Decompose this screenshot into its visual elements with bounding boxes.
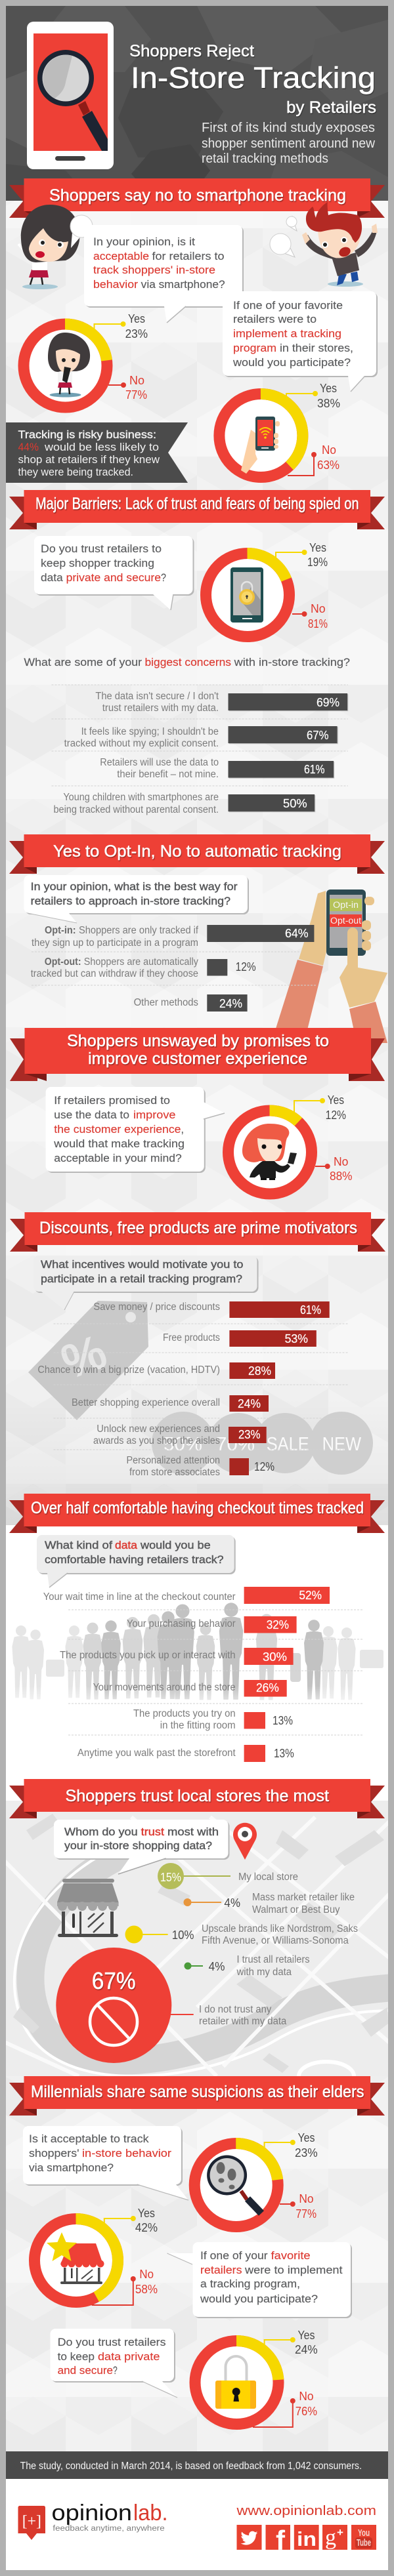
icon: padlock: [215, 2356, 256, 2409]
question bubble: acceptable: behavior: [93, 278, 138, 291]
source note bar: The study, conducted in March 2014, is based on feedback from 1,042 consumers.: [20, 2461, 362, 2472]
donut chart: trust 19 / 81: [206, 554, 289, 636]
labels: no 77 percent: [280, 2192, 317, 2220]
heading ribbon: unswayed: improve customer experience: [88, 1050, 307, 1068]
bar: personalized attention 12 percent: 12%: [254, 1460, 274, 1473]
labels: yes 24 percent: [265, 2329, 318, 2356]
panel: millennials: [9, 2076, 385, 2427]
labels: no 76 percent: 76%: [296, 2405, 317, 2418]
bar: purchasing behavior 32 percent: Your purchasing behavior: [127, 1618, 236, 1629]
question bubble: acceptable: via smartphone?: [141, 278, 225, 291]
question bubble: improve experience: the customer experience: [54, 1123, 181, 1135]
question bubble: improve experience: use the data to: [54, 1109, 129, 1121]
data point: upscale brands 10 percent: [125, 1923, 358, 1946]
question bubble: trust retailers: private and secure: [66, 571, 161, 584]
question bubble: favorite retailers participate: would you participate?: [200, 2293, 318, 2305]
question bubble: acceptable to track: [23, 2126, 188, 2200]
bar: retailers benefit 61 percent: [100, 757, 334, 780]
background: hexagon light panel: [6, 201, 388, 1526]
heading ribbon: unswayed: Shoppers unswayed by promises to: [67, 1032, 329, 1050]
icon: favorite store with star: [47, 2232, 104, 2284]
bar: young children 50 percent: 50%: [283, 797, 307, 810]
question bubble: favorite retailers: would you participate?: [232, 356, 351, 369]
data point: my local store 15 percent: 15%: [160, 1871, 181, 1884]
background: white checkout panel: [6, 1525, 388, 1807]
bar: unlock experiences 23 percent: Unlock new experiences and: [97, 1423, 220, 1435]
icon: hand holding phone with wifi: [241, 417, 280, 474]
question bubble: incentives: participate in a retail tracking program?: [41, 1273, 242, 1285]
labels: no 63 percent: No: [322, 443, 336, 457]
labels: no 58 percent: No: [139, 2268, 154, 2281]
donut chart: acceptable 23 / 77: [24, 324, 107, 407]
question bubble: acceptable: In your opinion, is it: [93, 235, 195, 248]
question bubble: acceptable: track shoppers' in-store: [93, 264, 215, 276]
question bubble: acceptable: acceptable: [93, 250, 149, 262]
bar: opt-in 64 percent: Opt-in:: [45, 925, 76, 936]
panel: incentives: [10, 1212, 385, 1478]
question: biggest concerns: with in-store tracking?: [234, 656, 350, 668]
labels: yes 23 percent: [95, 312, 148, 340]
bar: personalized attention 12 percent: Personalized attention: [126, 1455, 220, 1466]
icon: storefront: [57, 1879, 119, 1937]
labels: no 88 percent: [315, 1155, 352, 1183]
data point: mass market 4 percent: [184, 1892, 355, 1915]
labels: no 76 percent: No: [299, 2390, 314, 2403]
data point: no retailers 67 percent: I do not trust any: [199, 2004, 272, 2015]
question bubble: acceptable to track: in-store behavior: [82, 2147, 171, 2159]
icon: twitter: [236, 2525, 261, 2550]
data point: no retailers 67 percent: [56, 1948, 287, 2063]
labels: no 81 percent: No: [311, 602, 326, 615]
illustration: discount price tag: %: [55, 1324, 114, 1389]
icon: google plus: +: [337, 2526, 343, 2539]
labels: no 88 percent: 88%: [330, 1170, 352, 1183]
logo: opinionlab: feedback anytime, anywhere: [53, 2525, 165, 2533]
bar: free products 53 percent: [163, 1330, 317, 1347]
icon: phone with padlock: [230, 567, 263, 623]
labels: yes 24 percent: 24%: [295, 2343, 318, 2356]
background: hexagon lower panel: [6, 2076, 388, 2451]
callout: tracking is risky business: they were being tracked.: [18, 466, 133, 478]
illustration: discount price tag: [28, 1301, 148, 1420]
character: angry man: [302, 202, 378, 287]
question bubble: acceptable: [84, 225, 244, 323]
labels: no 77 percent: No: [299, 2192, 314, 2205]
question bubble: trust retailers: ?: [161, 571, 166, 584]
data point: mass market 4 percent: Walmart or Best Buy: [252, 1904, 340, 1915]
question: biggest concerns: biggest concerns: [144, 656, 231, 668]
heading ribbon: checkout: [9, 1494, 385, 1533]
labels: yes 38 percent: 38%: [317, 397, 340, 410]
data point: my local store 15 percent: [158, 1863, 298, 1889]
heading ribbon: smartphone tracking: Shoppers say no to smartphone tracking: [49, 186, 346, 205]
bar: data not secure 69 percent: trust retailers with my data.: [102, 703, 219, 714]
question bubble: acceptable to track: Is it acceptable to track: [29, 2133, 149, 2145]
bar chart: incentives: [37, 1301, 330, 1478]
callout: tracking is risky business: 44%: [18, 441, 39, 453]
donut chart: millennials acceptable 23 / 77: [194, 2144, 278, 2226]
heading ribbon: millennials: Millennials share same suspicions as their elders: [31, 2083, 364, 2101]
panel: local stores: [9, 1779, 385, 2063]
bar: fitting room 13 percent: in the fitting room: [160, 1720, 236, 1731]
panel: header: [27, 22, 376, 169]
question bubble: favorite retailers participate: favorite: [271, 2249, 311, 2262]
question bubble: whom do you trust: [54, 1820, 230, 1874]
heading ribbon: major barriers: [9, 490, 385, 529]
bar: unlock experiences 23 percent: awards as you shop the aisles: [93, 1435, 220, 1446]
data point: all retailers 4 percent: [184, 1954, 310, 1978]
callout: tracking is risky business: shop at retailers if they knew: [18, 453, 160, 466]
question bubble: favorite retailers participate: were to implement: [244, 2264, 343, 2276]
question bubble: what data: would you be: [140, 1539, 211, 1551]
bar: opt-out 12 percent: Opt-out:: [45, 956, 81, 968]
labels: no 81 percent: 81%: [308, 617, 328, 630]
question bubble: favorite retailers participate: retailers: [200, 2264, 242, 2276]
labels: yes 19 percent: Yes: [309, 541, 326, 554]
logo: opinionlab: opinion: [51, 2501, 132, 2525]
icon: man speech bubbles: [270, 216, 297, 257]
logo: opinionlab: [18, 2501, 168, 2540]
heading ribbon: discounts: Discounts, free products are prime motivators: [39, 1219, 357, 1237]
labels: yes 12 percent: Yes: [328, 1094, 344, 1107]
bar: better experience 24 percent: Better shopping experience overall: [72, 1397, 220, 1408]
labels: yes 42 percent: [104, 2207, 158, 2234]
footer white panel: [6, 2479, 388, 2570]
data point: upscale brands 10 percent: 10%: [172, 1929, 194, 1942]
bar: fitting room 13 percent: [133, 1708, 293, 1731]
illustration: hands holding phone with opt-in and opt-out: [271, 889, 387, 1043]
bar: feels like spying 67 percent: 67%: [307, 729, 328, 742]
bar: storefront 13 percent: 13%: [274, 1747, 294, 1760]
bar: opt-out 12 percent: 12%: [236, 960, 256, 973]
background: shopper silhouettes: [6, 1603, 388, 1715]
bar: wait time 52 percent: Your wait time in line at the checkout counter: [43, 1591, 236, 1603]
icon: facebook: [265, 2525, 290, 2556]
bar: retailers benefit 61 percent: 61%: [304, 763, 324, 776]
question bubble: improve experience: [46, 1087, 225, 1173]
bar: feels like spying 67 percent: [64, 726, 337, 749]
labels: no 77 percent: [108, 374, 147, 401]
icon: google plus: g: [325, 2525, 336, 2550]
icon: youtube: Tube: [357, 2537, 371, 2548]
bar: personalized attention 12 percent: [126, 1455, 274, 1478]
website url: www.opinionlab.com: [236, 2504, 376, 2518]
bar: products picked up 30 percent: 30%: [263, 1650, 287, 1664]
icon: linkedin: [294, 2525, 319, 2550]
question bubble: acceptable to track: shoppers': [29, 2147, 79, 2159]
question bubble: favorite retailers: [223, 291, 378, 392]
footer: [18, 2501, 376, 2556]
bar: movements 26 percent: 26%: [256, 1681, 279, 1694]
bar: free products 53 percent: Free products: [163, 1332, 220, 1343]
subtitle: shopper sentiment around new: [202, 136, 376, 151]
source note bar: [6, 2451, 388, 2479]
data point: upscale brands 10 percent: Upscale brands like Nordstrom, Saks: [202, 1923, 358, 1934]
bar: young children 50 percent: [54, 792, 315, 815]
bar: storefront 13 percent: [77, 1745, 294, 1762]
question bubble: what data: What kind of: [45, 1539, 112, 1551]
question bubble: keep data private: and secure: [58, 2364, 113, 2377]
panel: opt-in: [9, 834, 387, 1043]
title: by Retailers: [286, 98, 376, 117]
illustration: sale stickers: 50%: [164, 1434, 202, 1455]
heading ribbon: trust local stores: [9, 1779, 385, 1818]
background: header dark panel: [6, 6, 388, 201]
illustration: sale stickers: 70%: [216, 1434, 255, 1455]
subtitle: retail tracking methods: [202, 152, 328, 166]
bar: opt-in 64 percent: they sign up to participate in a program: [32, 937, 198, 949]
bar: opt-in 64 percent: 64%: [285, 927, 309, 940]
heading ribbon: millennials: [9, 2076, 385, 2116]
title: In-Store Tracking: [131, 61, 376, 94]
heading ribbon: discounts: [10, 1212, 385, 1252]
donut chart: millennials trust 24 / 76: [195, 2341, 278, 2424]
labels: yes 38 percent: [286, 382, 340, 410]
bar: movements 26 percent: Your movements around the store: [93, 1682, 236, 1693]
question bubble: keep data private: [50, 2329, 177, 2398]
labels: yes 23 percent: Yes: [128, 312, 145, 325]
bar: other methods 24 percent: 24%: [219, 997, 242, 1010]
bar: better experience 24 percent: [72, 1395, 269, 1412]
data point: all retailers 4 percent: 4%: [209, 1960, 225, 1973]
question bubble: best way: retailers to approach in-store tracking?: [31, 895, 230, 907]
question bubble: acceptable to track: via smartphone?: [29, 2161, 114, 2174]
heading ribbon: opt-in: Yes to Opt-In, No to automatic tracking: [53, 842, 341, 861]
question bubble: keep data private: to keep: [58, 2350, 95, 2363]
question bubble: what data: comfortable having retailers track?: [45, 1553, 224, 1566]
bar: storefront 13 percent: Anytime you walk past the storefront: [77, 1748, 236, 1759]
data point: upscale brands 10 percent: Fifth Avenue, or Williams-Sonoma: [202, 1935, 349, 1946]
labels: yes 23 percent: Yes: [298, 2131, 315, 2144]
question bubble: incentives: [33, 1256, 259, 1310]
data point: mass market 4 percent: 4%: [224, 1896, 240, 1910]
labels: no 77 percent: No: [129, 374, 144, 387]
bar: fitting room 13 percent: The products you try on: [133, 1708, 236, 1719]
bar: other methods 24 percent: Other methods: [134, 997, 198, 1008]
bar: fitting room 13 percent: 13%: [273, 1714, 293, 1727]
icon: woman speech bubble: [70, 215, 93, 248]
bar: opt-in 64 percent: [32, 925, 314, 949]
labels: yes 12 percent: 12%: [326, 1109, 346, 1122]
illustration: sale stickers: SALE: [267, 1434, 309, 1455]
question bubble: improve experience: would that make tracking: [53, 1137, 185, 1150]
bar: personalized attention 12 percent: from store associates: [129, 1467, 220, 1478]
background: street map: [0, 1801, 394, 2091]
question bubble: keep data private: data private: [98, 2350, 160, 2363]
background: darker band behind discounts: [6, 1397, 388, 1526]
callout: tracking is risky business: would be less likely to: [44, 441, 159, 453]
labels: yes 23 percent: 23%: [125, 327, 148, 340]
icon: facebook: f: [276, 2525, 286, 2556]
labels: yes 19 percent: [276, 541, 328, 569]
question bubble: trust retailers: keep shopper tracking: [41, 557, 154, 569]
labels: yes 12 percent: [294, 1094, 346, 1122]
bar: young children 50 percent: being tracked without parental consent.: [54, 804, 219, 815]
title: [129, 42, 376, 117]
bar: save money 61 percent: [93, 1301, 330, 1318]
bar chart: biggest concerns: [54, 691, 347, 815]
question bubble: favorite retailers: implement a tracking: [233, 327, 341, 340]
bar: better experience 24 percent: 24%: [238, 1397, 261, 1410]
labels: no 77 percent: 77%: [125, 388, 147, 401]
question bubble: whom do you trust: trust: [141, 1826, 164, 1838]
callout: tracking is risky business: [6, 422, 188, 483]
icon: google plus: [322, 2525, 347, 2550]
character: surprised woman: [18, 205, 80, 289]
question bubble: improve experience: ,: [181, 1123, 184, 1135]
question bubble: favorite retailers: retailers were to: [233, 313, 317, 325]
character: red-haired woman with phone: [242, 1124, 297, 1180]
illustration: sale stickers: [152, 1412, 373, 1475]
title: Shoppers Reject: [129, 42, 254, 60]
bar: opt-out 12 percent: tracked but can withdraw if they choose: [31, 968, 198, 979]
icon: location pin: [233, 1823, 257, 1860]
question bubble: what data: data: [115, 1539, 138, 1551]
panel: shoppers say no: [6, 178, 385, 483]
data point: no retailers 67 percent: retailer with my data: [199, 2016, 287, 2027]
question bubble: favorite retailers: in their stores,: [280, 342, 353, 354]
icon: youtube: [351, 2525, 376, 2550]
callout: tracking is risky business: Tracking is risky business:: [18, 428, 156, 441]
bar: products picked up 30 percent: [60, 1648, 294, 1665]
bar: retailers benefit 61 percent: their benefit – not mine.: [117, 769, 219, 780]
icon: magnifier with footprints: [207, 2156, 261, 2213]
labels: no 63 percent: [288, 443, 339, 476]
bar: data not secure 69 percent: 69%: [317, 696, 339, 709]
bar: save money 61 percent: 61%: [300, 1303, 321, 1317]
logo: opinionlab: lab.: [133, 2501, 168, 2525]
character: woman with phone: [48, 333, 90, 398]
bar: big prize 28 percent: Chance to win a big prize (vacation, HDTV): [37, 1364, 220, 1376]
labels: yes 24 percent: Yes: [298, 2329, 315, 2342]
icon: smartphone with magnifier: [27, 22, 114, 169]
question bubble: favorite retailers: If one of your favorite: [233, 299, 343, 312]
question bubble: improve experience: improve: [133, 1109, 176, 1121]
question bubble: acceptable: for retailers to: [152, 250, 225, 262]
data point: all retailers 4 percent: I trust all retailers: [236, 1954, 310, 1965]
labels: no 81 percent: [292, 602, 328, 630]
question bubble: trust retailers: data: [41, 571, 63, 584]
question bubble: trust retailers: [34, 536, 194, 610]
bar: purchasing behavior 32 percent: 32%: [267, 1618, 289, 1631]
bar: other methods 24 percent: [134, 994, 248, 1012]
labels: no 77 percent: 77%: [296, 2207, 317, 2220]
question bubble: best way: In your opinion, what is the best way for: [31, 880, 238, 893]
heading ribbon: trust local stores: Shoppers trust local stores the most: [66, 1787, 329, 1805]
bar chart: data tracking comfort: [43, 1587, 330, 1762]
labels: yes 42 percent: Yes: [138, 2207, 155, 2220]
question bubble: best way: [24, 875, 249, 923]
data point: no retailers 67 percent: 67%: [92, 1967, 136, 1994]
bar: opt-out 12 percent: [31, 956, 256, 979]
bar: purchasing behavior 32 percent: [127, 1616, 297, 1633]
labels: yes 23 percent: 23%: [295, 2146, 318, 2159]
question bubble: trust retailers: Do you trust retailers to: [41, 542, 162, 555]
heading ribbon: opt-in: [9, 834, 385, 874]
subtitle: First of its kind study exposes: [202, 121, 375, 135]
question bubble: keep data private: Do you trust retailers: [58, 2336, 166, 2348]
bar: wait time 52 percent: 52%: [299, 1589, 322, 1602]
labels: no 88 percent: No: [334, 1155, 348, 1168]
question bubble: whom do you trust: Whom do you: [64, 1826, 138, 1838]
question bubble: what data: [37, 1535, 236, 1587]
bar: opt-in 64 percent: Shoppers are only tracked if: [79, 925, 199, 936]
bar: products picked up 30 percent: The products you pick up or interact with: [60, 1650, 236, 1661]
question bubble: keep data private: ?: [113, 2364, 118, 2377]
question bubble: incentives: What incentives would motivate you to: [41, 1258, 243, 1271]
bar: big prize 28 percent: 28%: [248, 1364, 271, 1378]
question: biggest concerns: What are some of your: [24, 656, 142, 668]
subtitle: [202, 121, 376, 166]
question bubble: whom do you trust: your in-store shopping data?: [64, 1839, 212, 1852]
bar: opt-out 12 percent: Shoppers are automatically: [84, 956, 198, 968]
icon: linkedin: in: [297, 2527, 317, 2550]
labels: yes 42 percent: 42%: [135, 2221, 158, 2234]
heading ribbon: unswayed: [10, 1028, 385, 1081]
labels: no 76 percent: [253, 2390, 317, 2427]
bar: wait time 52 percent: [43, 1587, 330, 1604]
bar: movements 26 percent: [93, 1680, 287, 1696]
bar: feels like spying 67 percent: It feels like spying; I shouldn't be: [81, 726, 219, 737]
labels: no 58 percent: 58%: [135, 2283, 158, 2296]
panel: customer experience: [10, 1028, 385, 1194]
illustration: hands holding phone with opt-in and opt-out: Opt-in: [333, 900, 359, 910]
logo: opinionlab: [+]: [22, 2513, 41, 2530]
bar: save money 61 percent: Save money / price discounts: [93, 1301, 220, 1313]
labels: yes 38 percent: Yes: [320, 382, 337, 395]
question bubble: favorite retailers participate: [167, 2242, 352, 2318]
bar chart: tracking approach: [31, 925, 314, 1012]
icon: youtube: You: [358, 2527, 370, 2539]
data point: all retailers 4 percent: with my data: [236, 1967, 292, 1978]
question bubble: improve experience: acceptable in your mind?: [54, 1152, 182, 1164]
bar: feels like spying 67 percent: tracked without my explicit consent.: [64, 738, 219, 749]
data point: mass market 4 percent: Mass market retailer like: [252, 1892, 355, 1903]
labels: no 63 percent: 63%: [317, 459, 339, 472]
donut chart: experience 12 / 88: [229, 1111, 311, 1194]
labels: yes 19 percent: 19%: [307, 556, 328, 569]
panel: major barriers: [9, 490, 385, 815]
donut chart: millennials participate 42 / 58: [34, 2218, 118, 2302]
data point: my local store 15 percent: My local store: [238, 1871, 298, 1883]
labels: yes 23 percent: [265, 2131, 318, 2159]
bar: free products 53 percent: 53%: [285, 1332, 308, 1345]
labels: no 58 percent: [92, 2268, 158, 2305]
donut chart: participate 38 / 63: [219, 394, 303, 478]
question bubble: favorite retailers: program: [233, 342, 276, 354]
social icons: [236, 2525, 376, 2556]
illustration: sale stickers: NEW: [322, 1434, 362, 1455]
question: biggest concerns: [24, 656, 350, 668]
bar: data not secure 69 percent: [95, 691, 347, 714]
bar: unlock experiences 23 percent: 23%: [238, 1428, 260, 1441]
heading ribbon: smartphone tracking: [9, 178, 385, 218]
bar: data not secure 69 percent: The data isn't secure / I don't: [95, 691, 219, 702]
bar: retailers benefit 61 percent: Retailers will use the data to: [100, 757, 219, 768]
question bubble: favorite retailers participate: a tracking program,: [200, 2278, 300, 2290]
bar: big prize 28 percent: [37, 1362, 275, 1379]
bar: young children 50 percent: Young children with smartphones are: [63, 792, 219, 803]
bar: unlock experiences 23 percent: [93, 1423, 267, 1446]
illustration: hands holding phone with opt-in and opt-out: Opt-out: [330, 916, 361, 926]
question bubble: improve experience: If retailers promised to: [54, 1094, 170, 1107]
question bubble: favorite retailers participate: If one of your: [200, 2249, 268, 2262]
panel: checkout: [9, 1494, 385, 1762]
question bubble: whom do you trust: most with: [167, 1826, 219, 1838]
